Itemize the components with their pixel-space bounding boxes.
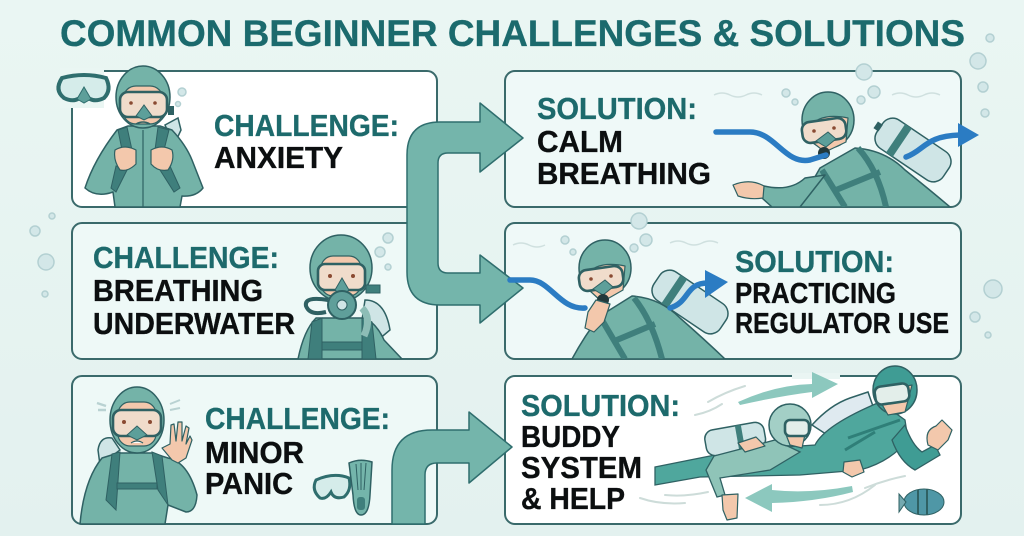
panel: challenge anxiety [72,71,437,207]
arrow: minor panic to buddy system [392,412,512,524]
text: buddy: BUDDY [521,419,620,454]
fish [899,489,944,515]
swim arrow right [738,372,838,405]
panel: solution practicing regulator use [505,223,961,359]
arrow: challenges to solutions split [407,103,523,323]
text: panic: PANIC [205,466,293,501]
bubbles and ripples [714,63,940,106]
text: system: SYSTEM [521,450,642,485]
scuba tank [651,269,729,335]
panel: solution buddy system [505,376,961,524]
panel: solution calm breathing [505,71,961,207]
breath flow calm breathing [716,123,979,161]
hand at mouth [585,300,610,332]
big diver [655,366,952,485]
text: anxiety: ANXIETY [214,140,343,175]
text: minor: MINOR [205,435,304,470]
figure: diver with regulator [298,233,402,359]
label: challenge anxiety: CHALLENGE: [214,108,399,143]
diver body [800,148,950,207]
text: underwater: UNDERWATER [93,306,295,341]
scuba tank [874,117,952,183]
text: and help: & HELP [521,481,625,516]
text: calm: CALM [537,124,623,159]
label: challenge breathing: CHALLENGE: [93,240,279,275]
label: challenge minor panic: CHALLENGE: [205,401,390,436]
flow arrowhead [705,270,728,298]
harness [822,148,886,207]
diver arm [762,175,825,207]
label: solution regulator: SOLUTION: [735,244,894,279]
text: breathing: BREATHING [93,273,263,308]
figure: panicking diver with raised hand [80,387,197,524]
head [578,240,631,306]
icon: mask and fin [314,460,372,515]
head [801,92,854,159]
breath flow [510,280,585,308]
hand [733,182,764,199]
panel: challenge breathing underwater [72,223,437,359]
panel: challenge minor panic [72,376,437,524]
text: breathing: BREATHING [537,156,711,191]
small diver [703,404,811,520]
label: solution buddy: SOLUTION: [521,388,680,423]
icon: dive mask top left [58,68,109,108]
harness [602,298,662,359]
background bubbles [30,34,1002,338]
diver body [572,296,725,359]
bubbles and ripples [513,213,718,255]
figure: calm breathing diver [714,64,956,207]
title: COMMON BEGINNER CHALLENGES & SOLUTIONS [60,13,965,54]
figure: anxious diver [85,66,203,207]
label: solution calm: SOLUTION: [537,91,697,126]
figure: buddy divers [640,366,952,520]
swim arrow left [745,484,853,512]
text: regulator use: REGULATOR USE [735,308,949,340]
text: practicing: PRACTICING [735,278,896,310]
motion lines [640,386,905,505]
figure: regulator practice diver [510,213,733,359]
